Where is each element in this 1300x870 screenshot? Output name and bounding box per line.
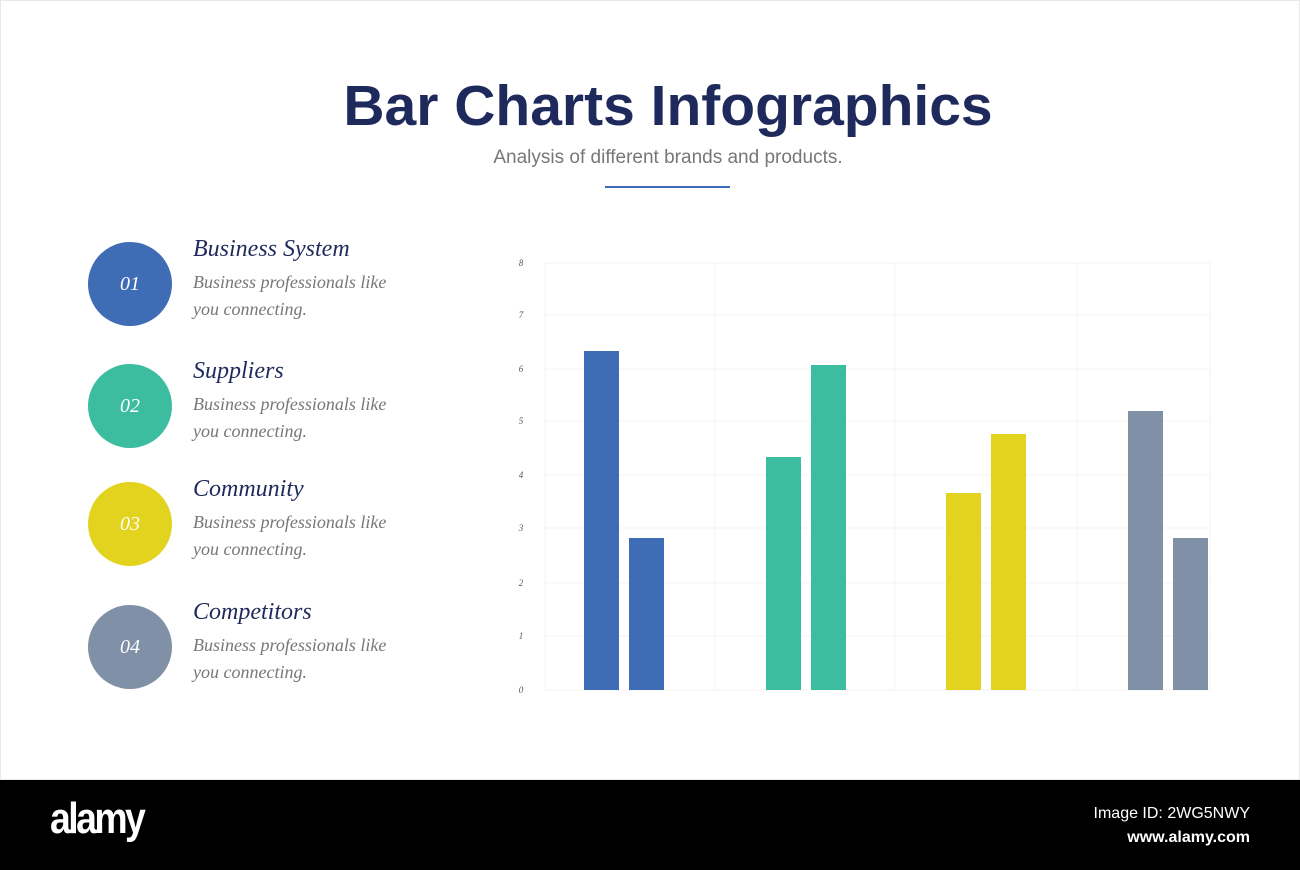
subtitle: Analysis of different brands and products. <box>493 147 843 168</box>
y axis labels: 2 <box>519 578 524 588</box>
item 02: Suppliers <box>193 358 284 384</box>
legend list <box>88 236 386 689</box>
y axis labels: 8 <box>519 258 524 268</box>
footer logo: alamy <box>50 794 143 843</box>
item 02 <box>88 358 386 448</box>
item 02: 02 <box>120 394 140 416</box>
underline accent <box>605 186 730 188</box>
item 01: Business professionals like <box>193 272 386 292</box>
footer id <box>1094 805 1250 846</box>
footer id: www.alamy.com <box>1127 829 1250 846</box>
y axis labels: 4 <box>519 470 524 480</box>
item 01 <box>88 236 386 326</box>
item 04: Competitors <box>193 599 312 625</box>
y axis labels: 0 <box>519 685 524 695</box>
title: Bar Charts Infographics <box>343 74 993 138</box>
footer bar <box>0 780 1300 870</box>
item 01: 01 <box>120 272 140 294</box>
item 01: Business System <box>193 236 350 262</box>
item 01: you connecting. <box>193 299 307 319</box>
item 04 <box>88 599 386 689</box>
y axis labels <box>518 258 524 695</box>
y axis labels: 1 <box>519 631 523 641</box>
bar chart <box>518 258 1210 695</box>
item 02: you connecting. <box>193 421 307 441</box>
bars <box>584 351 1208 690</box>
item 03: you connecting. <box>193 539 307 559</box>
item 03 <box>88 476 386 566</box>
y axis labels: 3 <box>518 523 524 533</box>
item 04: Business professionals like <box>193 635 386 655</box>
item 02: Business professionals like <box>193 394 386 414</box>
y axis labels: 5 <box>519 416 524 426</box>
item 03: 03 <box>120 512 140 534</box>
item 04: 04 <box>120 636 140 658</box>
y axis labels: 6 <box>519 364 524 374</box>
item 04: you connecting. <box>193 662 307 682</box>
footer id: Image ID: 2WG5NWY <box>1094 805 1250 822</box>
item 03: Community <box>193 476 304 502</box>
item 03: Business professionals like <box>193 512 386 532</box>
y axis labels: 7 <box>519 310 524 320</box>
